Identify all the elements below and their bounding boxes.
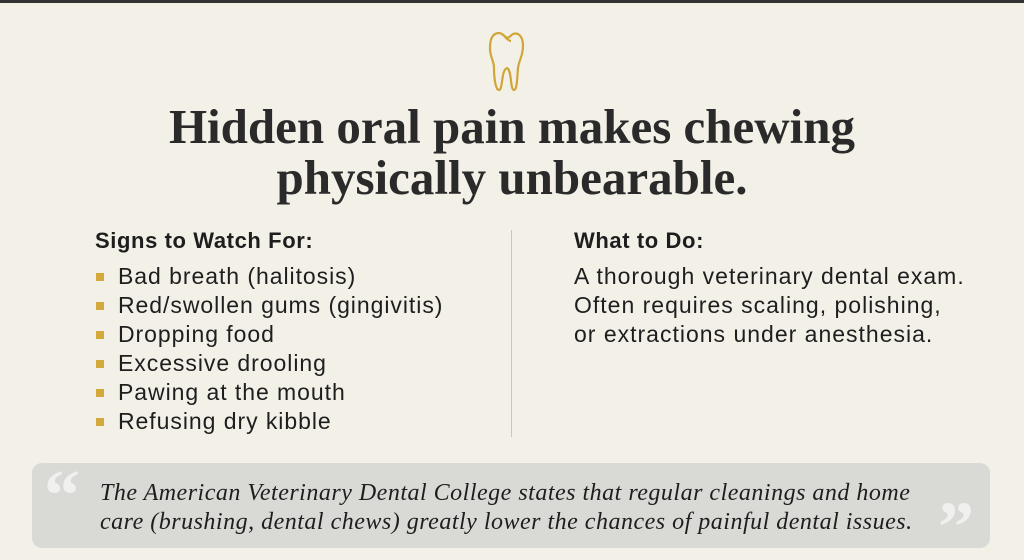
list: signs: Refusing dry kibble [118, 408, 332, 434]
panel: signs to watch for [95, 228, 443, 434]
icon: open quote: “ [44, 455, 80, 535]
list: signs: Pawing at the mouth [118, 379, 346, 405]
text: recommendation [574, 263, 965, 347]
text: quote [100, 480, 913, 535]
list: signs: Dropping food [118, 321, 275, 347]
text: recommendation: or extractions under anesthesia. [574, 321, 933, 347]
heading: signs: Signs to Watch For: [95, 228, 313, 253]
callout: quote [32, 463, 990, 548]
text: quote: care (brushing, dental chews) greatly lower the chances of painful dental issues. [100, 509, 913, 535]
list: signs [96, 263, 443, 434]
text: quote: The American Veterinary Dental College states that regular cleanings and home [100, 480, 910, 506]
text: recommendation: A thorough veterinary dental exam. [574, 263, 965, 289]
panel: what to do [574, 228, 965, 347]
heading: what to do: What to Do: [574, 228, 704, 253]
list: signs: Excessive drooling [118, 350, 327, 376]
title: Hidden oral pain makes chewing [169, 99, 855, 154]
text: recommendation: Often requires scaling, polishing, [574, 292, 942, 318]
title [169, 99, 855, 205]
icon: tooth [488, 32, 524, 92]
list: signs: Bad breath (halitosis) [118, 263, 356, 289]
list: signs: Red/swollen gums (gingivitis) [118, 292, 443, 318]
title: physically unbearable. [276, 150, 748, 205]
